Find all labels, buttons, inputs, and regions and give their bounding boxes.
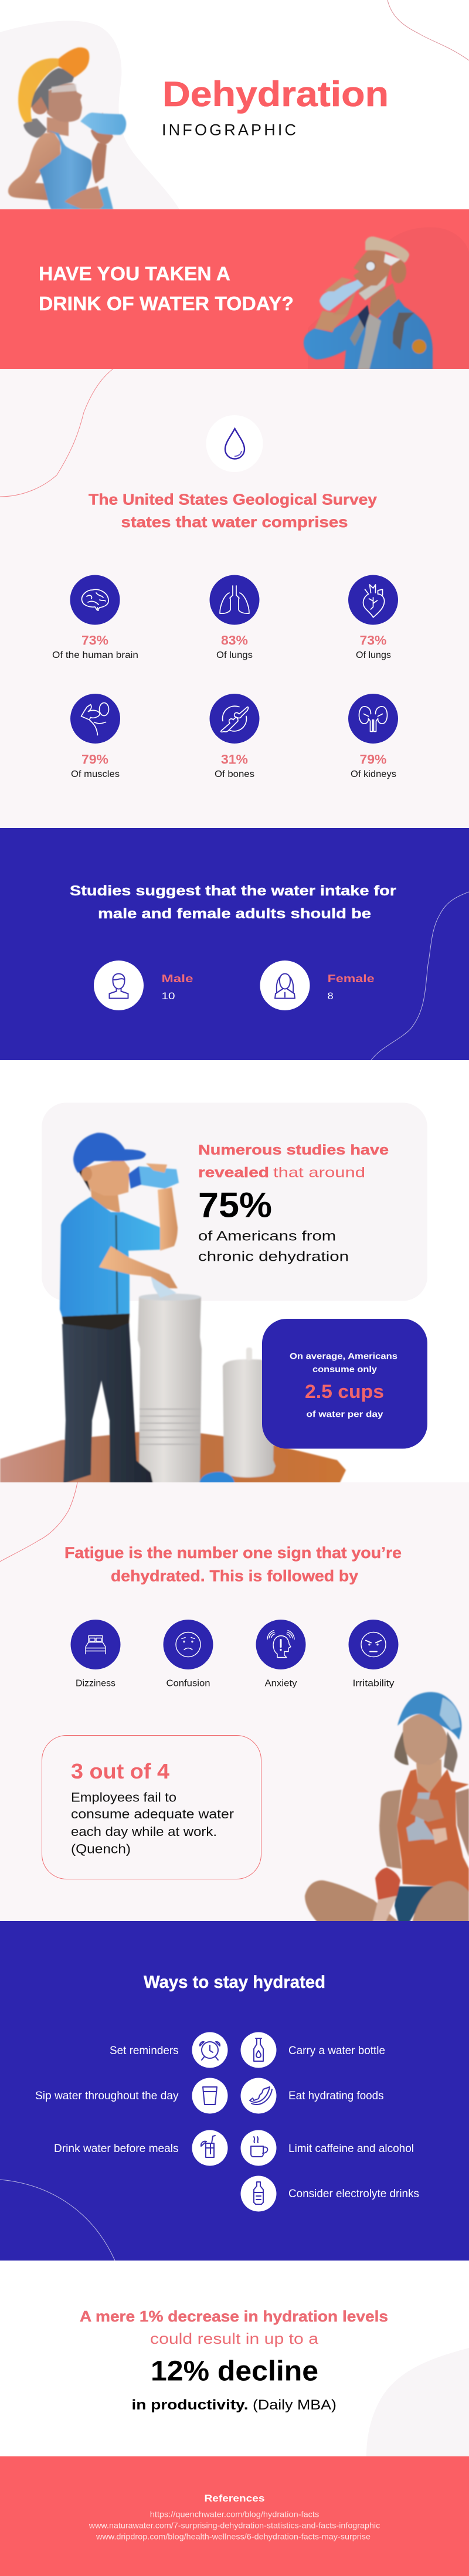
productivity statistic: 12% decline <box>151 2356 318 2387</box>
composition heading <box>89 490 378 531</box>
card: 75 percent statistic: that around <box>273 1165 365 1181</box>
intake: male: 10 <box>162 990 175 1002</box>
callout: 3 out of 4: (Quench) <box>71 1842 131 1857</box>
banner heading: HAVE YOU TAKEN A <box>39 263 230 284</box>
stat: bones: 31% <box>221 752 248 767</box>
card: 75 percent statistic: chronic dehydration <box>198 1249 349 1264</box>
stat: kidneys: 79% <box>360 752 387 767</box>
card: 75 percent statistic: revealed <box>198 1165 269 1181</box>
stat: muscles: 79% <box>81 752 108 767</box>
stat: lungs: 83% <box>221 633 248 647</box>
symptom: confusion: Confusion <box>166 1678 210 1689</box>
callout: 3 out of 4: each day while at work. <box>71 1824 217 1839</box>
stat: kidneys <box>348 694 398 779</box>
tip: electrolyte drinks <box>240 2175 419 2212</box>
productivity statistic: in productivity. <box>131 2397 249 2413</box>
stat: bones: Of bones <box>215 769 254 779</box>
references heading: References <box>204 2493 265 2504</box>
productivity statistic: A mere 1% decrease in hydration levels <box>80 2307 388 2325</box>
stat: heart: Of lungs <box>356 650 391 660</box>
tip: limit caffeine <box>240 2130 414 2166</box>
stat: heart: 73% <box>360 633 387 647</box>
section: references footer <box>0 2456 469 2576</box>
ways heading: Ways to stay hydrated <box>144 1973 325 1992</box>
section: recommended water intake <box>0 828 469 1060</box>
section: chronic dehydration <box>0 1060 469 1484</box>
symptom: anxiety: Anxiety <box>265 1678 297 1689</box>
tip: set reminders: Set reminders <box>110 2045 179 2057</box>
illustration: older man drinking <box>304 236 433 369</box>
stat: brain: 73% <box>81 633 108 647</box>
signs heading <box>64 1544 402 1584</box>
callout: 3 out of 4: Employees fail to <box>71 1790 176 1804</box>
callout: 3 out of 4 <box>42 1736 261 1879</box>
stat: heart <box>348 575 398 660</box>
symptom: dizziness: Dizziness <box>76 1678 115 1689</box>
section: question banner <box>0 209 469 369</box>
tip: carry a water bottle: Carry a water bottle <box>288 2045 385 2057</box>
tip: electrolyte drinks: Consider electrolyte drinks <box>288 2188 419 2200</box>
tip: sip water <box>35 2078 227 2113</box>
callout: 3 out of 4: 3 out of 4 <box>71 1759 169 1783</box>
stat: muscles <box>70 694 120 779</box>
callout: 3 out of 4: consume adequate water <box>71 1807 234 1821</box>
stat: bones <box>210 694 259 779</box>
card: 2.5 cups statistic <box>262 1319 427 1448</box>
card: 2.5 cups statistic: On average, Americans <box>290 1352 397 1362</box>
illustration: man in blue cap drinking at water filters <box>0 1133 346 1484</box>
stat: kidneys: Of kidneys <box>351 769 396 779</box>
tip: sip water: Sip water throughout the day <box>35 2090 179 2102</box>
stat: lungs: Of lungs <box>216 650 253 660</box>
symptom: confusion <box>163 1620 213 1689</box>
reference links: www.naturawater.com/7-surprising-dehydration-statistics-and-facts-infographic <box>89 2521 380 2530</box>
symptom: irritability <box>348 1620 399 1689</box>
section: productivity <box>0 2261 469 2456</box>
tip: drink before meals <box>54 2130 227 2166</box>
tip: carry a water bottle <box>240 2032 385 2068</box>
illustration: seated woman in blue cap <box>305 1692 469 1923</box>
subtitle: INFOGRAPHIC <box>162 121 296 139</box>
intake heading <box>70 883 396 922</box>
symptom: irritability: Irritability <box>353 1678 395 1689</box>
card: 75 percent statistic: 75% <box>198 1186 272 1224</box>
tip: set reminders <box>110 2032 227 2068</box>
icon: water drop <box>206 415 263 472</box>
stat: brain <box>52 575 138 660</box>
reference links: https://quenchwater.com/blog/hydration-facts <box>150 2510 319 2519</box>
title <box>162 74 389 139</box>
intake heading: male and female adults should be <box>98 906 371 922</box>
reference links <box>89 2510 380 2541</box>
symptom: anxiety <box>256 1620 306 1689</box>
signs heading: dehydrated. This is followed by <box>111 1567 358 1584</box>
card: 75 percent statistic <box>42 1102 427 1301</box>
banner heading: DRINK OF WATER TODAY? <box>39 293 294 314</box>
composition heading: The United States Geological Survey <box>89 490 378 508</box>
banner heading <box>39 263 294 314</box>
card: 2.5 cups statistic: of water per day <box>306 1410 383 1419</box>
composition heading: states that water comprises <box>121 513 348 531</box>
card: 75 percent statistic: of Americans from <box>198 1228 336 1243</box>
intake: female <box>260 961 375 1010</box>
productivity statistic: (Daily MBA) <box>253 2397 337 2413</box>
intake: female: 8 <box>328 990 334 1002</box>
illustration: woman in yellow cap drinking <box>8 47 126 209</box>
tip: eat hydrating foods <box>240 2078 384 2113</box>
symptom: dizziness <box>70 1620 121 1689</box>
signs heading: Fatigue is the number one sign that you’re <box>64 1544 402 1562</box>
productivity statistic: could result in up to a <box>150 2330 319 2347</box>
title: Dehydration <box>162 74 389 114</box>
tip: limit caffeine: Limit caffeine and alcohol <box>288 2143 414 2155</box>
reference links: www.dripdrop.com/blog/health-wellness/6-dehydration-facts-may-surprise <box>96 2532 371 2541</box>
stat: brain: Of the human brain <box>52 650 138 660</box>
stat: lungs <box>210 575 259 660</box>
section: header <box>0 0 469 209</box>
card: 2.5 cups statistic: 2.5 cups <box>305 1381 384 1402</box>
stat: muscles: Of muscles <box>71 769 120 779</box>
section: water composition <box>0 369 469 828</box>
tip: drink before meals: Drink water before meals <box>54 2143 179 2155</box>
intake: male: Male <box>162 973 193 985</box>
tip: eat hydrating foods: Eat hydrating foods <box>288 2090 384 2102</box>
intake: male <box>94 961 193 1010</box>
section: ways to stay hydrated <box>0 1921 469 2261</box>
section: signs of dehydration <box>0 1482 469 1923</box>
intake heading: Studies suggest that the water intake for <box>70 883 396 899</box>
card: 2.5 cups statistic: consume only <box>312 1365 378 1374</box>
intake: female: Female <box>328 973 375 985</box>
productivity statistic <box>80 2307 388 2413</box>
card: 75 percent statistic: Numerous studies have <box>198 1142 389 1158</box>
